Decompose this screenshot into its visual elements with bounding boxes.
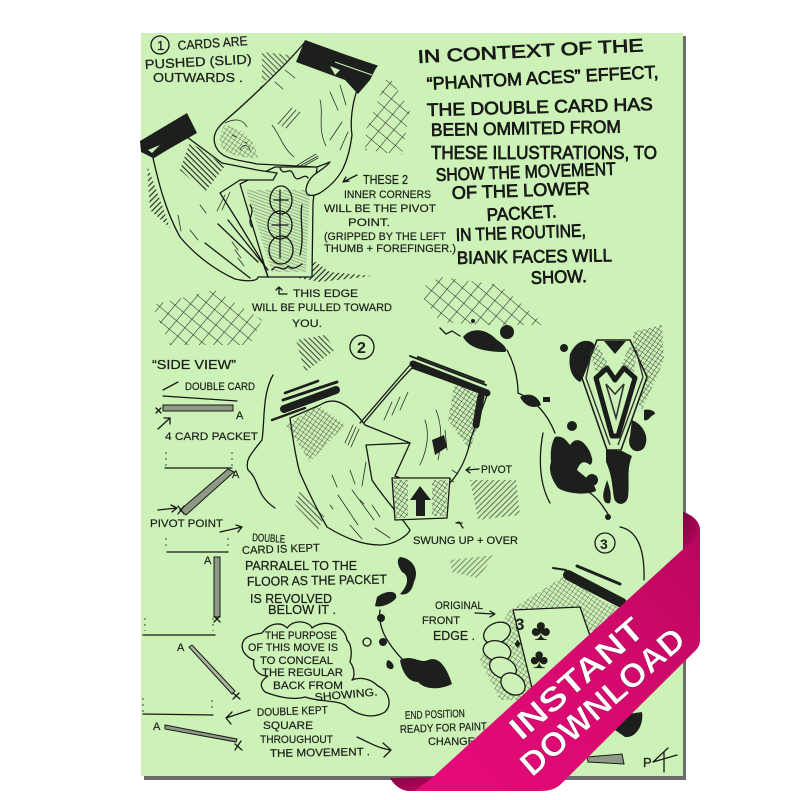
heading block: explanatory note: OF THE LOWER [451, 178, 590, 203]
annotation: pivot corners: INNER CORNERS [344, 189, 431, 201]
label: end position [400, 708, 487, 748]
step 1 caption: OUTWARDS . [153, 70, 243, 85]
annotation: pulled edge [252, 287, 392, 330]
splatter border: lower [363, 557, 452, 688]
note: double card kept parallel: BELOW IT . [268, 602, 336, 617]
diagram 3: A [204, 555, 212, 567]
card back [240, 167, 317, 277]
diagram 2: PIVOT POINT [150, 518, 223, 530]
ribbon: instant download [390, 512, 700, 791]
label: end position: READY FOR PAINT [400, 721, 487, 736]
step 3 number [595, 533, 615, 553]
label: pivot: PIVOT [481, 464, 512, 476]
page number: P [643, 755, 652, 770]
right cuff [296, 40, 377, 94]
label: original front edge: FRONT [422, 615, 460, 627]
right cuff [410, 356, 487, 425]
heading block: explanatory note: BEEN OMMITED FROM [431, 117, 621, 140]
note: double card kept parallel: PARRALEL TO THE [245, 558, 357, 573]
hand background [480, 575, 625, 700]
heading block: explanatory note: “PHANTOM ACES” EFFECT, [426, 62, 659, 94]
heading block: explanatory note: IN THE ROUTINE, [455, 220, 586, 245]
diagram 5: A [153, 721, 161, 733]
annotation: pivot corners: POINT. [348, 217, 390, 229]
diagram 1: A [236, 410, 244, 422]
diagram 1: DOUBLE CARD [185, 381, 255, 393]
ribbon bottom fold [390, 777, 435, 791]
wrist contour [360, 365, 410, 423]
label: swung up and over: SWUNG UP + OVER [413, 535, 518, 547]
note: double kept square: SQUARE [263, 720, 313, 732]
playing card: three of clubs: 3 [515, 615, 524, 634]
ribbon label: download: DOWNLOAD [512, 620, 692, 783]
diagram 2: A [232, 469, 240, 481]
diagram 1 [156, 381, 258, 443]
annotation: pivot corners [324, 172, 456, 255]
arrow to double card note [220, 525, 242, 532]
note: double kept square: THROUGHOUT [260, 734, 333, 746]
callout: thought cloud: OF THIS MOVE IS [248, 642, 338, 654]
step 1 caption: CARDS ARE [177, 33, 248, 53]
playing card: three of clubs [513, 607, 595, 700]
playing card: three of clubs: ♣ [530, 643, 548, 674]
callout: thought cloud: THE REGULAR [262, 667, 343, 679]
hatching: centre background [296, 277, 664, 578]
diagram 2 [150, 452, 240, 530]
diagram 3 [166, 538, 228, 622]
annotation: pulled edge: YOU. [292, 318, 322, 330]
step 1 caption [144, 33, 252, 85]
label: pivot [466, 464, 512, 476]
bottom right details under ribbon [587, 712, 642, 764]
illustration: step 2 hands and card [247, 335, 518, 547]
annotation: pivot corners: (GRIPPED BY THE LEFT [324, 231, 446, 243]
illustration: step 3 hand holding card [400, 527, 677, 772]
step 2 number: 2 [357, 340, 366, 357]
callout: thought cloud: THE PURPOSE [265, 630, 337, 642]
note: double kept square [226, 705, 391, 760]
label: end position: END POSITION [405, 708, 465, 722]
fingers [480, 618, 529, 700]
title: side view: “SIDE VIEW” [152, 357, 236, 372]
callout: thought cloud: BACK FROM [273, 680, 343, 692]
cuff [553, 566, 622, 603]
callout: thought cloud: TO CONCEAL [260, 655, 333, 667]
hatching: step 1 background [152, 52, 410, 345]
ribbon label: instant: INSTANT [502, 610, 651, 747]
playing card: three of clubs: ♣ [531, 614, 551, 647]
ink splatter border: upper [440, 319, 655, 520]
illustration: step 1 hands and card [140, 40, 377, 281]
diagram 1: 4 CARD PACKET [165, 431, 258, 443]
step 1 caption: PUSHED (SLID) [144, 51, 252, 72]
lower hand [147, 137, 277, 281]
forearm contour [247, 375, 275, 508]
page number [643, 748, 677, 772]
note: double kept square: DOUBLE KEPT [257, 705, 328, 719]
side view diagrams [143, 357, 258, 750]
first hand [286, 401, 410, 545]
decoration: coffin emblem [582, 340, 647, 450]
note: double card kept parallel: CARD IS KEPT [242, 542, 320, 557]
step 2 number [350, 335, 374, 359]
ribbon band [413, 528, 700, 791]
note: double card kept parallel: IS REVOLVED [250, 591, 332, 606]
heading block: explanatory note: BIANK FACES WILL [457, 245, 612, 268]
note: double card kept parallel [242, 532, 387, 617]
diagram 4: A [177, 642, 185, 654]
annotation: pulled edge: WILL BE PULLED TOWARD [252, 302, 392, 314]
annotation: pivot corners: WILL BE THE PIVOT [324, 203, 436, 215]
label: swung up and over [413, 522, 518, 547]
left cuff [272, 381, 337, 420]
label: original front edge: ORIGINAL [435, 600, 483, 612]
arm contour [620, 527, 644, 580]
annotation: pivot corners: THESE 2 [363, 172, 408, 187]
heading block: explanatory note: IN CONTEXT OF THE [417, 35, 644, 67]
diagram 5 [143, 698, 242, 750]
heading block: explanatory note: SHOW THE MOVEMENT [435, 159, 616, 185]
paper sheet [141, 33, 686, 780]
heading block: explanatory note: PACKET. [486, 201, 557, 225]
upper hand [214, 42, 377, 195]
playing card: three of clubs: ♦ [514, 635, 521, 651]
label: end position: CHANGE [428, 736, 475, 748]
label: original front edge [422, 600, 495, 643]
annotation: pivot corners: THUMB + FOREFINGER.) [324, 243, 456, 255]
heading block: explanatory note: SHOW. [530, 266, 587, 288]
label: original front edge: EDGE . [433, 628, 475, 643]
callout: thought cloud: SHOWING. [314, 687, 378, 704]
heading block: explanatory note: THESE ILLUSTRATIONS, TO [431, 143, 657, 163]
step 3 number: 3 [600, 536, 608, 552]
callout: thought cloud [242, 622, 389, 716]
note: double kept square: THE MOVEMENT . [270, 746, 370, 760]
swung card with arrow [392, 478, 450, 520]
note: double card kept parallel: FLOOR AS THE PACKET [247, 572, 387, 589]
second hand [362, 368, 487, 490]
heading block: explanatory note: THE DOUBLE CARD HAS [427, 94, 653, 120]
heading block: explanatory note [417, 35, 659, 288]
step 1 caption: 1 [157, 38, 164, 53]
diagram 4 [143, 618, 240, 699]
annotation: pulled edge: THIS EDGE [293, 288, 358, 300]
ribbon top fold [683, 512, 700, 550]
note: double card kept parallel: DOUBLE [252, 532, 285, 546]
left cuff [140, 113, 197, 158]
